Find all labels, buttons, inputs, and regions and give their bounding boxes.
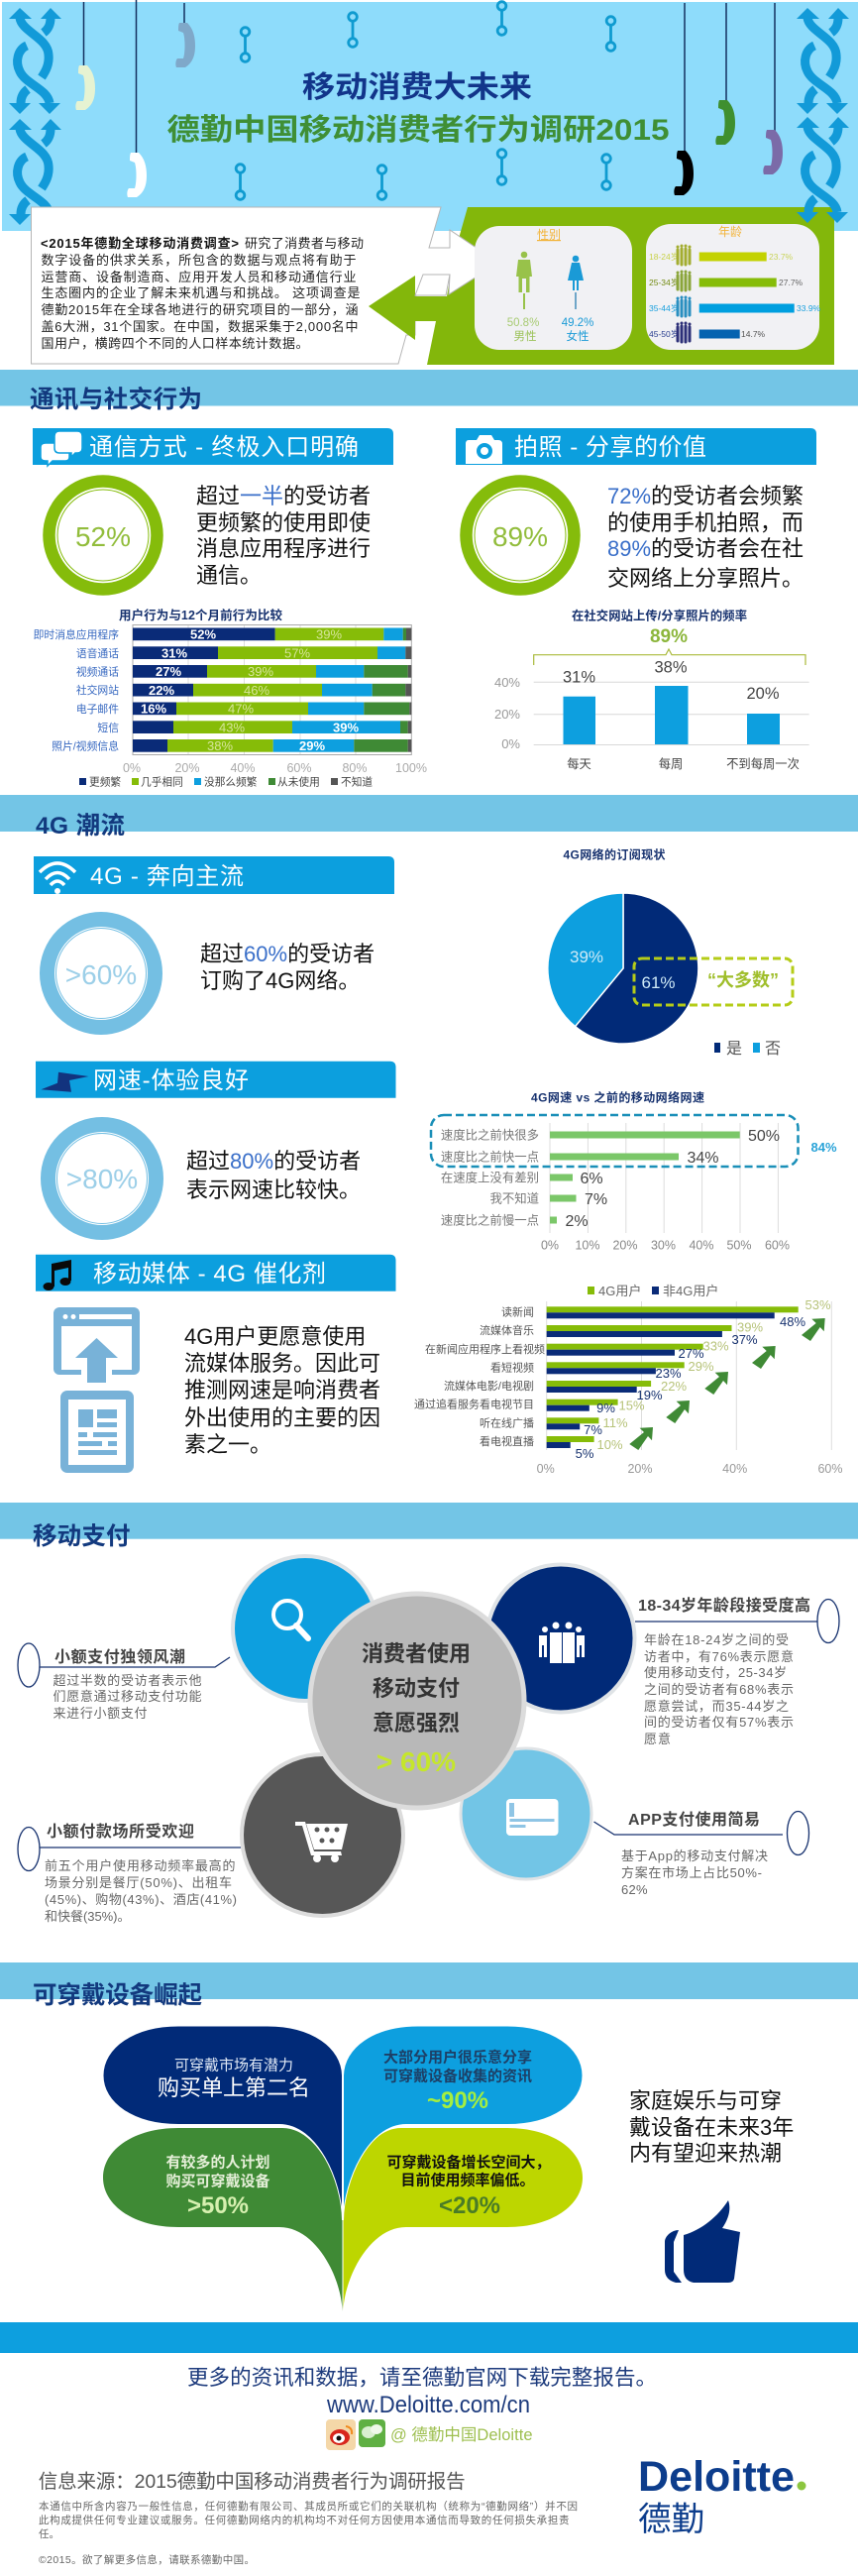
callout: popular venues: 小额付款场所受欢迎 — [47, 1822, 194, 1841]
source and disclaimer — [39, 2471, 578, 2566]
bar chart: speed comparison: 10% — [575, 1239, 600, 1253]
row: 照片/视频信息: 29% — [299, 738, 325, 753]
panel heading: 移动媒体 — [36, 1255, 396, 1291]
callout: app payment: 基于App的移动支付解决 — [621, 1848, 768, 1863]
ring: 89% — [466, 482, 575, 589]
intro callout: 国用户，横跨四个不同的人口样本统计数据。 — [42, 336, 309, 351]
gender panel: 49.2% — [562, 317, 593, 329]
section band: 4G 潮流: 4G 潮流 — [36, 812, 125, 840]
title — [166, 71, 670, 147]
row: 语音通话 — [76, 645, 411, 660]
row: 短信: 短信 — [97, 721, 119, 734]
logo: Deloitte: Deloitte — [638, 2453, 795, 2501]
chain link decorations — [236, 2, 615, 199]
row: 视频通话: 27% — [156, 664, 181, 679]
logo: Deloitte: 德勤 — [638, 2502, 704, 2538]
bar chart: media use: 29% — [688, 1359, 714, 1374]
ring: >60%: >60% — [65, 959, 137, 990]
text: messaging: 消息应用程序进行 — [196, 536, 371, 561]
circle: centre message: > 60% — [376, 1746, 456, 1777]
source and disclaimer: ©2015。欲了解更多信息，请联系德勤中国。 — [39, 2553, 255, 2566]
panel heading: 拍照: 拍照 - 分享的价值 — [514, 434, 706, 461]
ring: 52% — [50, 482, 157, 589]
footer call to action — [187, 2366, 657, 2418]
bar chart: speed comparison: 40% — [689, 1239, 714, 1253]
text: 4G subscribers: 订购了4G网络。 — [200, 968, 360, 993]
column chart: photo sharing frequency: 每天 — [567, 756, 591, 771]
circle: card — [461, 1748, 591, 1879]
row: 电子邮件: 47% — [228, 702, 254, 716]
gender panel: 性别 — [537, 228, 561, 242]
arrows: growth — [629, 1318, 825, 1450]
callout: age group: 18-34岁年龄段接受度高 — [638, 1596, 810, 1615]
callout: small payments: 来进行小额支付 — [54, 1706, 147, 1721]
bar chart: media use — [414, 1284, 843, 1476]
column chart: photo sharing frequency: 31% — [563, 668, 595, 686]
row 18-24: 18-24岁 — [649, 252, 679, 262]
column chart: photo sharing frequency: 38% — [654, 658, 688, 676]
text: messaging — [196, 484, 371, 588]
x axis labels: 40% — [230, 761, 256, 775]
bar chart: media use: 33% — [702, 1338, 729, 1354]
source and disclaimer: 信息来源：2015德勤中国移动消费者行为调研报告 — [39, 2471, 466, 2493]
petal: green: 有较多的人计划 — [165, 2153, 270, 2171]
legend: 不知道 — [341, 775, 373, 789]
legend: 几乎相同 — [141, 775, 183, 789]
panel heading: 网速 — [36, 1062, 396, 1098]
icon: woman — [568, 256, 584, 309]
gender panel: 男性 — [513, 329, 537, 343]
row: 视频通话: 视频通话 — [76, 664, 119, 678]
bar chart: media use: 流媒体电影/电视剧 — [444, 1379, 534, 1393]
x axis labels: 20% — [174, 761, 200, 775]
bar chart: speed comparison: 50% — [748, 1128, 780, 1145]
ring: >80%: >80% — [66, 1164, 138, 1194]
callout: age group: 愿意 — [644, 1732, 671, 1746]
row 25-34 — [649, 272, 804, 290]
x axis labels: 60% — [286, 761, 312, 775]
ring: >60% — [48, 920, 155, 1027]
bar chart: media use: 48% — [780, 1314, 805, 1329]
row: 即时消息应用程序: 即时消息应用程序 — [34, 627, 119, 641]
petal: blue: ~90% — [427, 2087, 488, 2114]
panel heading: 拍照 — [456, 428, 816, 465]
callout: app payment: APP支付使用简易 — [628, 1810, 760, 1829]
bar chart: speed comparison: 60% — [765, 1239, 790, 1253]
section band: 通讯与社交行为: 通讯与社交行为 — [30, 386, 202, 413]
bar chart: speed comparison: 6% — [581, 1171, 603, 1187]
intro callout: 数字设备的供求关系，所包含的数据与观点将有助于 — [42, 253, 357, 268]
panel heading: 4G 奔向主流 — [34, 856, 394, 894]
title: 移动消费大未来 — [302, 71, 532, 104]
petal: lime: 可穿戴设备增长空间大， — [386, 2153, 551, 2171]
intro callout: <2015年德勤全球移动消费调查> — [41, 236, 239, 251]
callout: popular venues: 和快餐(35%)。 — [45, 1909, 131, 1924]
row: 电子邮件: 16% — [141, 702, 166, 716]
callout: age group — [635, 1596, 839, 1746]
callout: majority — [634, 958, 793, 1005]
bar chart: speed comparison: 50% — [726, 1239, 752, 1253]
petal: blue: 大部分用户很乐意分享 — [383, 2048, 532, 2066]
text: wearable outlook: 家庭娱乐与可穿 — [629, 2088, 782, 2113]
bar chart: media use: 听在线广播 — [480, 1415, 534, 1429]
source and disclaimer: 任。 — [39, 2527, 59, 2540]
panel: demographics — [369, 207, 834, 365]
text: media: 推测网速是响消费者 — [184, 1378, 380, 1402]
footer call to action: www.Deloitte.com/cn — [326, 2392, 530, 2418]
bar chart: media use: 读新闻 — [501, 1304, 534, 1318]
bar chart: media use: 37% — [731, 1332, 758, 1347]
text: photos — [607, 484, 804, 591]
intro callout: 生态圈内的企业了解未来机遇与和挑战。 这项调查是 — [42, 285, 361, 300]
bar chart: media use: 10% — [596, 1437, 623, 1452]
header background — [2, 2, 858, 231]
text: photos: 72%的受访者会频繁 — [607, 484, 804, 508]
row: 语音通话: 语音通话 — [76, 646, 119, 660]
text: speed: 超过80%的受访者 — [186, 1149, 361, 1174]
bar chart: speed comparison — [431, 1090, 837, 1253]
x axis labels: 0% — [123, 761, 141, 775]
text: photos: 交网络上分享照片。 — [607, 566, 804, 591]
petal: navy: 可穿戴市场有潜力 — [174, 2058, 293, 2073]
text: media: 流媒体服务。因此可 — [184, 1351, 380, 1376]
petal: lime: <20% — [439, 2192, 500, 2219]
text: wearable outlook: 内有望迎来热潮 — [629, 2141, 782, 2166]
text: media: 4G用户更愿意使用 — [184, 1324, 366, 1349]
petal cluster — [103, 2026, 583, 2311]
column chart: photo sharing frequency: 20% — [746, 685, 780, 703]
row: 视频通话: 39% — [248, 664, 273, 679]
gender panel — [475, 226, 632, 350]
row 45-50 — [649, 323, 766, 342]
pie chart: 4G subscription: 4G网络的订阅现状 — [563, 846, 666, 862]
green backing panel — [369, 207, 834, 365]
petal: navy — [103, 2026, 343, 2220]
row: 即时消息应用程序: 52% — [190, 626, 216, 642]
row: 即时消息应用程序 — [34, 626, 411, 642]
text: messaging: 通信。 — [196, 563, 262, 588]
pie chart: 4G subscription — [548, 846, 793, 1058]
callout: popular venues: (45%)、购物(43%)、酒店(41%) — [45, 1892, 237, 1907]
section band: 4G 潮流 — [0, 795, 858, 840]
row: 社交网站: 22% — [149, 683, 174, 698]
legend: 是 — [726, 1041, 742, 1058]
bar chart: speed comparison: 速度比之前快很多 — [441, 1128, 539, 1142]
bar chart: media use: 40% — [722, 1462, 747, 1476]
bar chart: speed comparison: 30% — [651, 1239, 676, 1253]
circle: centre message: 移动支付 — [373, 1676, 460, 1701]
bar chart: media use: 39% — [737, 1320, 763, 1334]
bar chart: media use: 通过追看服务看电视节目 — [414, 1398, 534, 1411]
bar chart: speed comparison: 速度比之前慢一点 — [441, 1213, 539, 1227]
bracket — [534, 649, 805, 665]
legend — [714, 1041, 781, 1058]
bar chart: speed comparison: 20% — [612, 1239, 638, 1253]
text: wearable outlook — [629, 2088, 794, 2166]
callout: app payment: 方案在市场上占比50%- — [621, 1865, 762, 1880]
text: media — [184, 1324, 380, 1457]
petal: navy: 购买单上第二名 — [158, 2075, 310, 2100]
bar chart: media use: 19% — [636, 1388, 663, 1402]
bar chart: media use: 0% — [537, 1462, 555, 1476]
bar chart: speed comparison: 速度比之前快一点 — [441, 1150, 539, 1164]
bar chart: media use: 7% — [584, 1422, 602, 1437]
legend: 没那么频繁 — [204, 775, 258, 789]
right twisted arrows — [797, 8, 849, 223]
icon: document — [60, 1391, 134, 1473]
legend: 从未使用 — [277, 775, 320, 789]
text: messaging: 更频繁的使用即使 — [196, 510, 371, 535]
footer band — [0, 2322, 858, 2353]
intro callout: 盖6大洲，31个国家。在中国，数据采集于2,000名中 — [42, 319, 359, 334]
footer call to action: 更多的资讯和数据，请至德勤官网下载完整报告。 — [187, 2366, 657, 2390]
bar chart: media use: 非4G用户 — [663, 1284, 718, 1298]
source and disclaimer: 本通信中所含内容乃一般性信息，任何德勤有限公司、其成员所或它们的关联机构（统称为“德勤网络”）并不因 — [39, 2500, 578, 2513]
circle: cart — [242, 1754, 403, 1916]
source and disclaimer: 此构成提供任何专业建议或服务。任何德勤网络内的机构均不对任何方因使用本通信而导致的任何损失承担责 — [39, 2514, 569, 2526]
legend: 更频繁 — [89, 775, 121, 789]
row 35-44: 35-44岁 — [649, 303, 679, 313]
section band: 移动支付 — [0, 1503, 858, 1550]
column chart: photo sharing frequency: 在社交网站上传/分享照片的频率 — [572, 609, 747, 622]
icon: wifi — [40, 863, 75, 894]
panel heading: 4G 奔向主流: 4G - 奔向主流 — [90, 863, 244, 890]
panel heading: 通信方式: 通信方式 - 终极入口明确 — [89, 434, 359, 461]
pie chart: 4G subscription: 39% — [570, 948, 603, 966]
section band: 移动支付: 移动支付 — [33, 1522, 131, 1550]
petal: blue — [343, 2026, 583, 2220]
circle: centre message: 意愿强烈 — [373, 1711, 460, 1736]
column chart: photo sharing frequency: 每周 — [659, 756, 683, 771]
row: 电子邮件: 电子邮件 — [76, 703, 119, 716]
callout: popular venues — [18, 1822, 241, 1924]
column chart: photo sharing frequency: 不到每周一次 — [726, 756, 800, 771]
icon: cart — [295, 1822, 348, 1862]
circle: centre message — [310, 1594, 524, 1808]
row 35-44 — [649, 297, 821, 316]
row: 短信: 43% — [219, 720, 245, 734]
text: 4G subscribers — [200, 942, 375, 993]
intro callout: 运营商、设备制造商、应用开发人员和移动通信行业 — [42, 270, 357, 284]
callout: majority: “大多数” — [707, 970, 779, 990]
row: 语音通话: 31% — [161, 645, 187, 660]
row 25-34: 25-34岁 — [649, 278, 679, 287]
callout: age group: 愿意尝试，而35-44岁之 — [644, 1699, 789, 1714]
circle: people — [487, 1564, 634, 1713]
circle: search — [233, 1556, 377, 1701]
text: media: 素之一。 — [184, 1432, 271, 1457]
section band: 可穿戴设备崛起 — [0, 1962, 858, 2009]
callout: popular venues: 前五个用户使用移动频率最高的 — [45, 1858, 236, 1873]
bar chart: speed comparison: 84% — [810, 1140, 837, 1155]
row: 电子邮件 — [76, 702, 411, 716]
row: 视频通话 — [76, 664, 411, 679]
icon: upload window — [54, 1307, 140, 1384]
age panel — [646, 224, 821, 350]
row: 短信 — [97, 720, 411, 734]
petal: blue: 可穿戴设备收集的资讯 — [383, 2068, 532, 2085]
bar chart: media use: 5% — [576, 1446, 594, 1461]
bar chart: media use: 23% — [655, 1366, 682, 1381]
circle: centre message: 消费者使用 — [362, 1641, 471, 1666]
bar chart: speed comparison: 7% — [585, 1191, 607, 1208]
social handle: @ 德勤中国Deloitte — [390, 2425, 533, 2444]
logo: Deloitte — [638, 2453, 806, 2538]
bar chart: media use: 看电视直播 — [480, 1434, 534, 1448]
pie chart: 4G subscription: 61% — [641, 973, 676, 992]
callout: popular venues: 场景分别是餐厅(50%)、出租车 — [45, 1875, 232, 1890]
column chart: photo sharing frequency: 89% — [650, 626, 688, 647]
petal: green: >50% — [187, 2192, 249, 2219]
section band: 可穿戴设备崛起: 可穿戴设备崛起 — [33, 1981, 202, 2009]
row 18-24 — [649, 246, 794, 265]
stacked bar chart: 用户行为与12个月前行为比较 — [119, 608, 282, 622]
age panel: 年龄 — [718, 225, 742, 239]
left twisted arrows — [9, 8, 61, 225]
column chart: photo sharing frequency: 0% — [501, 736, 520, 751]
callout: app payment: 62% — [621, 1882, 648, 1897]
intro callout: 研究了消费者与移动 — [245, 236, 364, 251]
text: photos: 的使用手机拍照，而 — [607, 510, 804, 535]
bar chart: media use: 60% — [817, 1462, 843, 1476]
text: photos: 89%的受访者会在社 — [607, 536, 804, 561]
row 45-50: 45-50岁 — [649, 329, 679, 339]
legend: 否 — [765, 1041, 781, 1058]
bar chart: speed comparison: 我不知道 — [489, 1191, 539, 1205]
icon: magnifier — [273, 1601, 308, 1638]
panel heading: 网速: 网速-体验良好 — [93, 1067, 249, 1094]
icon: weibo — [326, 2419, 356, 2450]
row: 社交网站: 46% — [244, 683, 269, 698]
petal: lime: 目前使用频率偏低。 — [400, 2171, 535, 2188]
bar chart: media use: 20% — [627, 1462, 653, 1476]
bar chart: media use: 流媒体音乐 — [480, 1323, 534, 1337]
legend — [79, 775, 373, 789]
callout: age group: 之间的受访者有68%表示 — [644, 1682, 794, 1697]
panel heading: 移动媒体: 移动媒体 - 4G 催化剂 — [93, 1261, 326, 1288]
row 25-34: 27.7% — [779, 278, 804, 287]
icon: lightning — [41, 1072, 89, 1092]
gender panel: 女性 — [567, 329, 589, 343]
callout: age group: 年龄在18-24岁之间的受 — [644, 1632, 789, 1647]
bar chart: speed comparison: 34% — [688, 1150, 719, 1167]
hanging phones — [75, 0, 783, 197]
bar chart: media use: 22% — [661, 1379, 687, 1394]
petal: lime — [343, 2128, 583, 2311]
callout: small payments: 们愿意通过移动支付功能 — [54, 1689, 202, 1704]
bar chart: media use: 9% — [596, 1400, 615, 1415]
icon: music note — [44, 1260, 71, 1290]
text: 4G subscribers: 超过60%的受访者 — [200, 942, 375, 966]
bar chart: media use: 15% — [618, 1398, 645, 1413]
x axis labels: 80% — [342, 761, 368, 775]
intro callout — [32, 207, 452, 364]
text: messaging: 超过一半的受访者 — [196, 484, 371, 508]
icon: man — [516, 252, 532, 309]
intro callout: 德勤2015年在全球各地进行的研究项目的一部分，涵 — [42, 302, 359, 317]
panel heading: 通信方式 — [33, 428, 393, 466]
callout: small payments: 小额支付独领风潮 — [54, 1647, 185, 1666]
row: 短信: 39% — [333, 720, 359, 734]
bar chart: speed comparison: 4G网速 vs 之前的移动网络网速 — [531, 1090, 704, 1104]
bar chart: speed comparison: 2% — [565, 1213, 589, 1230]
bar chart: media use: 在新闻应用程序上看视频 — [425, 1342, 545, 1356]
ring: 89%: 89% — [492, 521, 548, 552]
icon: thumbs up — [665, 2200, 740, 2283]
bar chart: speed comparison: 在速度上没有差别 — [441, 1170, 539, 1185]
column chart: photo sharing frequency: 20% — [494, 707, 520, 722]
bar chart: speed comparison: 0% — [541, 1239, 559, 1253]
row: 社交网站: 社交网站 — [76, 683, 119, 697]
text: media: 外出使用的主要的因 — [184, 1405, 380, 1430]
text: wearable outlook: 戴设备在未来3年 — [629, 2115, 794, 2140]
callout: age group: 使用移动支付，25-34岁 — [644, 1665, 787, 1680]
bar chart: media use: 27% — [678, 1346, 704, 1361]
row: 照片/视频信息: 照片/视频信息 — [52, 739, 119, 753]
row 45-50: 14.7% — [741, 329, 766, 339]
column chart: photo sharing frequency — [494, 609, 809, 771]
callout: age group: 访者中，有76%表示愿意 — [644, 1649, 794, 1664]
x axis labels: 100% — [395, 761, 427, 775]
callout: app payment — [594, 1810, 808, 1897]
bar chart: media use: 11% — [602, 1415, 628, 1430]
ring: >80% — [48, 1124, 157, 1233]
gender panel: 50.8% — [507, 317, 539, 329]
row 18-24: 23.7% — [769, 252, 794, 262]
icon: camera — [466, 435, 502, 464]
callout: small payments — [18, 1643, 230, 1721]
icon: card — [506, 1799, 559, 1836]
text: speed — [186, 1149, 361, 1202]
section band: 通讯与社交行为 — [0, 370, 858, 413]
ring: 52%: 52% — [75, 521, 131, 552]
title: 德勤中国移动消费者行为调研2015 — [166, 114, 670, 147]
callout: age group: 间的受访者仅有57%表示 — [644, 1715, 794, 1730]
stacked bar chart — [34, 608, 427, 789]
bar chart: media use: 看短视频 — [490, 1360, 534, 1374]
bar chart: media use: 53% — [804, 1297, 831, 1312]
row: 照片/视频信息 — [52, 738, 411, 753]
text: speed: 表示网速比较快。 — [186, 1177, 361, 1202]
petal: green: 购买可穿戴设备 — [165, 2173, 270, 2190]
row: 语音通话: 57% — [284, 645, 310, 660]
icon: people — [539, 1622, 585, 1663]
icon: wechat — [359, 2419, 385, 2447]
column chart: photo sharing frequency: 40% — [494, 675, 520, 690]
petal: green — [103, 2128, 343, 2311]
callout: small payments: 超过半数的受访者表示他 — [54, 1673, 202, 1688]
icon: chat bubbles — [41, 431, 82, 466]
x axis labels — [123, 761, 427, 775]
row 35-44: 33.9% — [797, 303, 821, 313]
row: 社交网站 — [76, 683, 411, 698]
bar chart: media use: 4G用户 — [598, 1284, 641, 1298]
white arrow — [415, 230, 498, 295]
row: 即时消息应用程序: 39% — [316, 626, 342, 642]
row: 照片/视频信息: 38% — [207, 738, 233, 753]
